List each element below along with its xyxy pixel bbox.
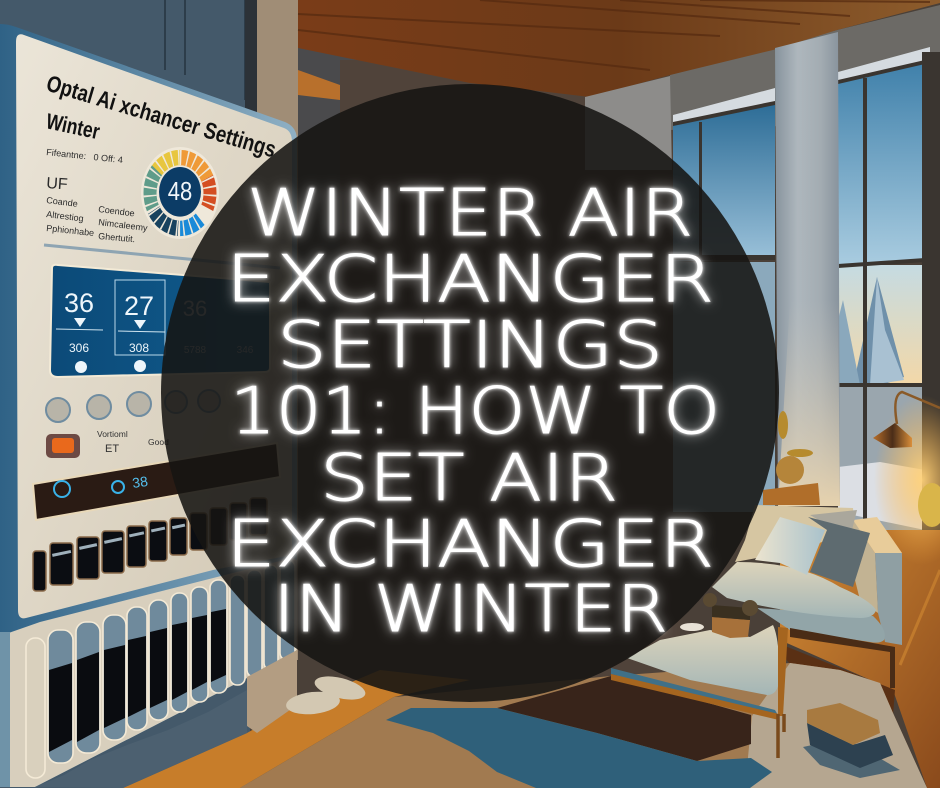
button labels: Good [148, 437, 169, 447]
plant pot [712, 617, 750, 638]
snowy ground [838, 385, 925, 530]
rug blue light patch [386, 708, 772, 788]
panel small labels: Nimcaleemy [98, 217, 149, 233]
sofa [712, 505, 902, 688]
right window upper glass [838, 62, 923, 265]
button labels: ET [105, 443, 119, 455]
lamp arm [895, 392, 940, 424]
title line 1: WINTER AIR [247, 176, 693, 251]
title line 7: IN WINTER [273, 572, 668, 647]
ottoman side rail [778, 627, 788, 716]
mode readout: 38 [131, 473, 149, 491]
lamp leg [900, 570, 940, 665]
lamp shade [873, 423, 912, 448]
panel small labels: Ghertutit. [98, 231, 136, 244]
dark circle overlay [161, 84, 779, 702]
cream pillow [755, 517, 825, 575]
pot rim [712, 605, 750, 620]
vent slot highlights [52, 524, 185, 557]
panel small labels: UF [46, 175, 68, 193]
left window lower glass [673, 262, 775, 512]
pillar shadow [245, 0, 257, 120]
yellow flowers [918, 483, 940, 527]
wooden ceiling [298, 0, 940, 97]
title [226, 176, 720, 647]
left window upper glass [673, 103, 775, 262]
right window lower glass [838, 265, 923, 385]
floor lamp [873, 392, 940, 665]
unit outer frame [0, 24, 297, 787]
panel heading: Optal Ai xchancer Settings [44, 70, 279, 162]
digital display screen: 346 [237, 345, 254, 356]
sofa seat cushion [712, 562, 876, 618]
button labels: Vortioml [97, 429, 128, 439]
panel small labels: Fifeantne: 0 Off: 4 [46, 147, 123, 165]
back pillow [810, 510, 857, 530]
wall below fins [35, 690, 247, 788]
housing body [0, 558, 297, 787]
gauge dial [141, 147, 219, 239]
lamp glow [874, 395, 940, 565]
plant table [763, 483, 820, 505]
wall panel seams [165, 0, 245, 100]
plant leaves [776, 411, 813, 484]
sofa arm front [875, 553, 902, 645]
small dish [680, 623, 704, 631]
panel small labels: Coande [46, 195, 78, 209]
concrete wall above windows [670, 5, 940, 130]
concrete pillar [247, 0, 298, 660]
sofa arm inside [850, 520, 878, 613]
lower radiator fins [0, 558, 297, 788]
pot plant [703, 593, 758, 616]
sheer centre curtain [775, 32, 840, 506]
floor cushions [285, 672, 368, 717]
house plant [763, 411, 820, 505]
digital display screen: 27 [124, 291, 154, 321]
panel divider [44, 245, 280, 268]
concrete wall [0, 0, 250, 788]
shaggy rug [240, 663, 927, 788]
left curtain [585, 76, 672, 170]
rug light right side [745, 663, 927, 788]
mode icons [54, 481, 124, 497]
ceiling slats [298, 0, 930, 70]
title line 6: EXCHANGER [226, 507, 714, 582]
button labels [97, 429, 169, 455]
back wall [340, 60, 680, 680]
snowy pine trees [838, 277, 904, 385]
digital display screen: 5788 [184, 345, 207, 356]
upper vent slots [33, 498, 267, 591]
wood floor left [123, 670, 470, 788]
gauge dial: 48 [168, 177, 192, 207]
white sills [673, 88, 775, 125]
panel small labels: Pphionhabe [46, 223, 95, 238]
round control buttons [46, 390, 220, 422]
digital display screen: 36 [183, 296, 207, 321]
ottoman blue strip [611, 668, 779, 717]
shelf wall [298, 40, 358, 340]
panel subheading: Winter [44, 108, 102, 144]
ottoman cushion [627, 625, 779, 695]
panel small labels [46, 147, 149, 244]
sofa lower cushion [757, 608, 885, 643]
sofa frame [790, 628, 895, 688]
title line 4: 101: HOW TO [230, 374, 720, 449]
title line 5: SET AIR [320, 441, 618, 516]
digital display screen [50, 265, 270, 377]
wood floor right [780, 530, 940, 788]
title line 2: EXCHANGER [226, 242, 714, 317]
window frames [673, 52, 940, 530]
floor and rug [123, 530, 940, 788]
floor under sofa [770, 640, 895, 715]
knit pillow [808, 517, 870, 587]
ottoman front rail [611, 674, 779, 720]
panel small labels: Coendoe [98, 204, 135, 218]
panel small labels: Altrestiog [46, 209, 84, 224]
stack of books [803, 703, 900, 778]
sofa arm top [853, 517, 902, 553]
dark mode bar [33, 443, 280, 520]
concrete base block [247, 650, 297, 733]
left housing shade [0, 632, 10, 787]
digital display screen: 36 [64, 288, 94, 318]
sofa back [735, 505, 855, 562]
winter windows [585, 32, 940, 530]
digital display screen: 306 [69, 341, 89, 355]
orange power button [46, 434, 80, 458]
ottoman [611, 593, 788, 758]
title line 3: SETTINGS [277, 308, 663, 383]
orange shelf [298, 70, 340, 100]
control panel face [16, 34, 292, 618]
rug shadow [497, 676, 751, 761]
digital display screen: 308 [129, 341, 149, 355]
air exchanger unit [0, 24, 297, 787]
ottoman legs [778, 714, 784, 758]
